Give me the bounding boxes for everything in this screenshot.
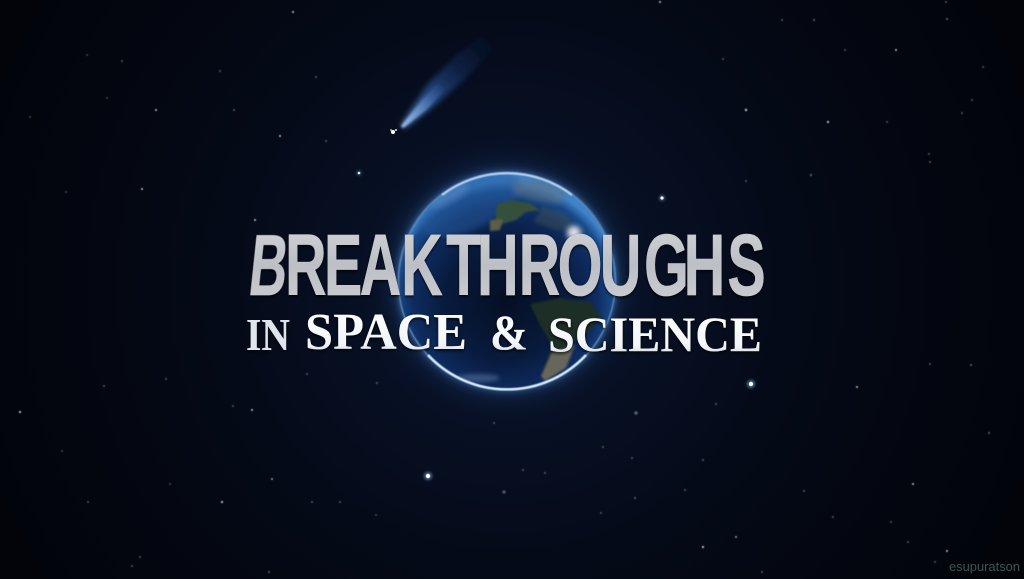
title line one: REAKTHROUGHS: REAKTHROUGHS <box>285 216 766 314</box>
subtitle word: SPACE: SPACE <box>305 304 467 361</box>
subtitle word: SCIENCE: SCIENCE <box>548 306 762 362</box>
subtitle ampersand: & <box>490 304 528 360</box>
globe with atmospheric rim <box>382 155 631 406</box>
continent: Europe <box>494 200 540 226</box>
subtitle word: IN: IN <box>246 309 290 360</box>
title <box>245 216 766 362</box>
continent: lower landmass <box>530 298 603 369</box>
upper ocean light <box>420 174 519 238</box>
comet with blue tail <box>390 24 506 134</box>
watermark: esupuratson <box>949 559 1020 574</box>
clouds <box>456 374 500 382</box>
title letter: slanted B: B <box>245 218 293 314</box>
bright blue stars <box>356 170 756 480</box>
